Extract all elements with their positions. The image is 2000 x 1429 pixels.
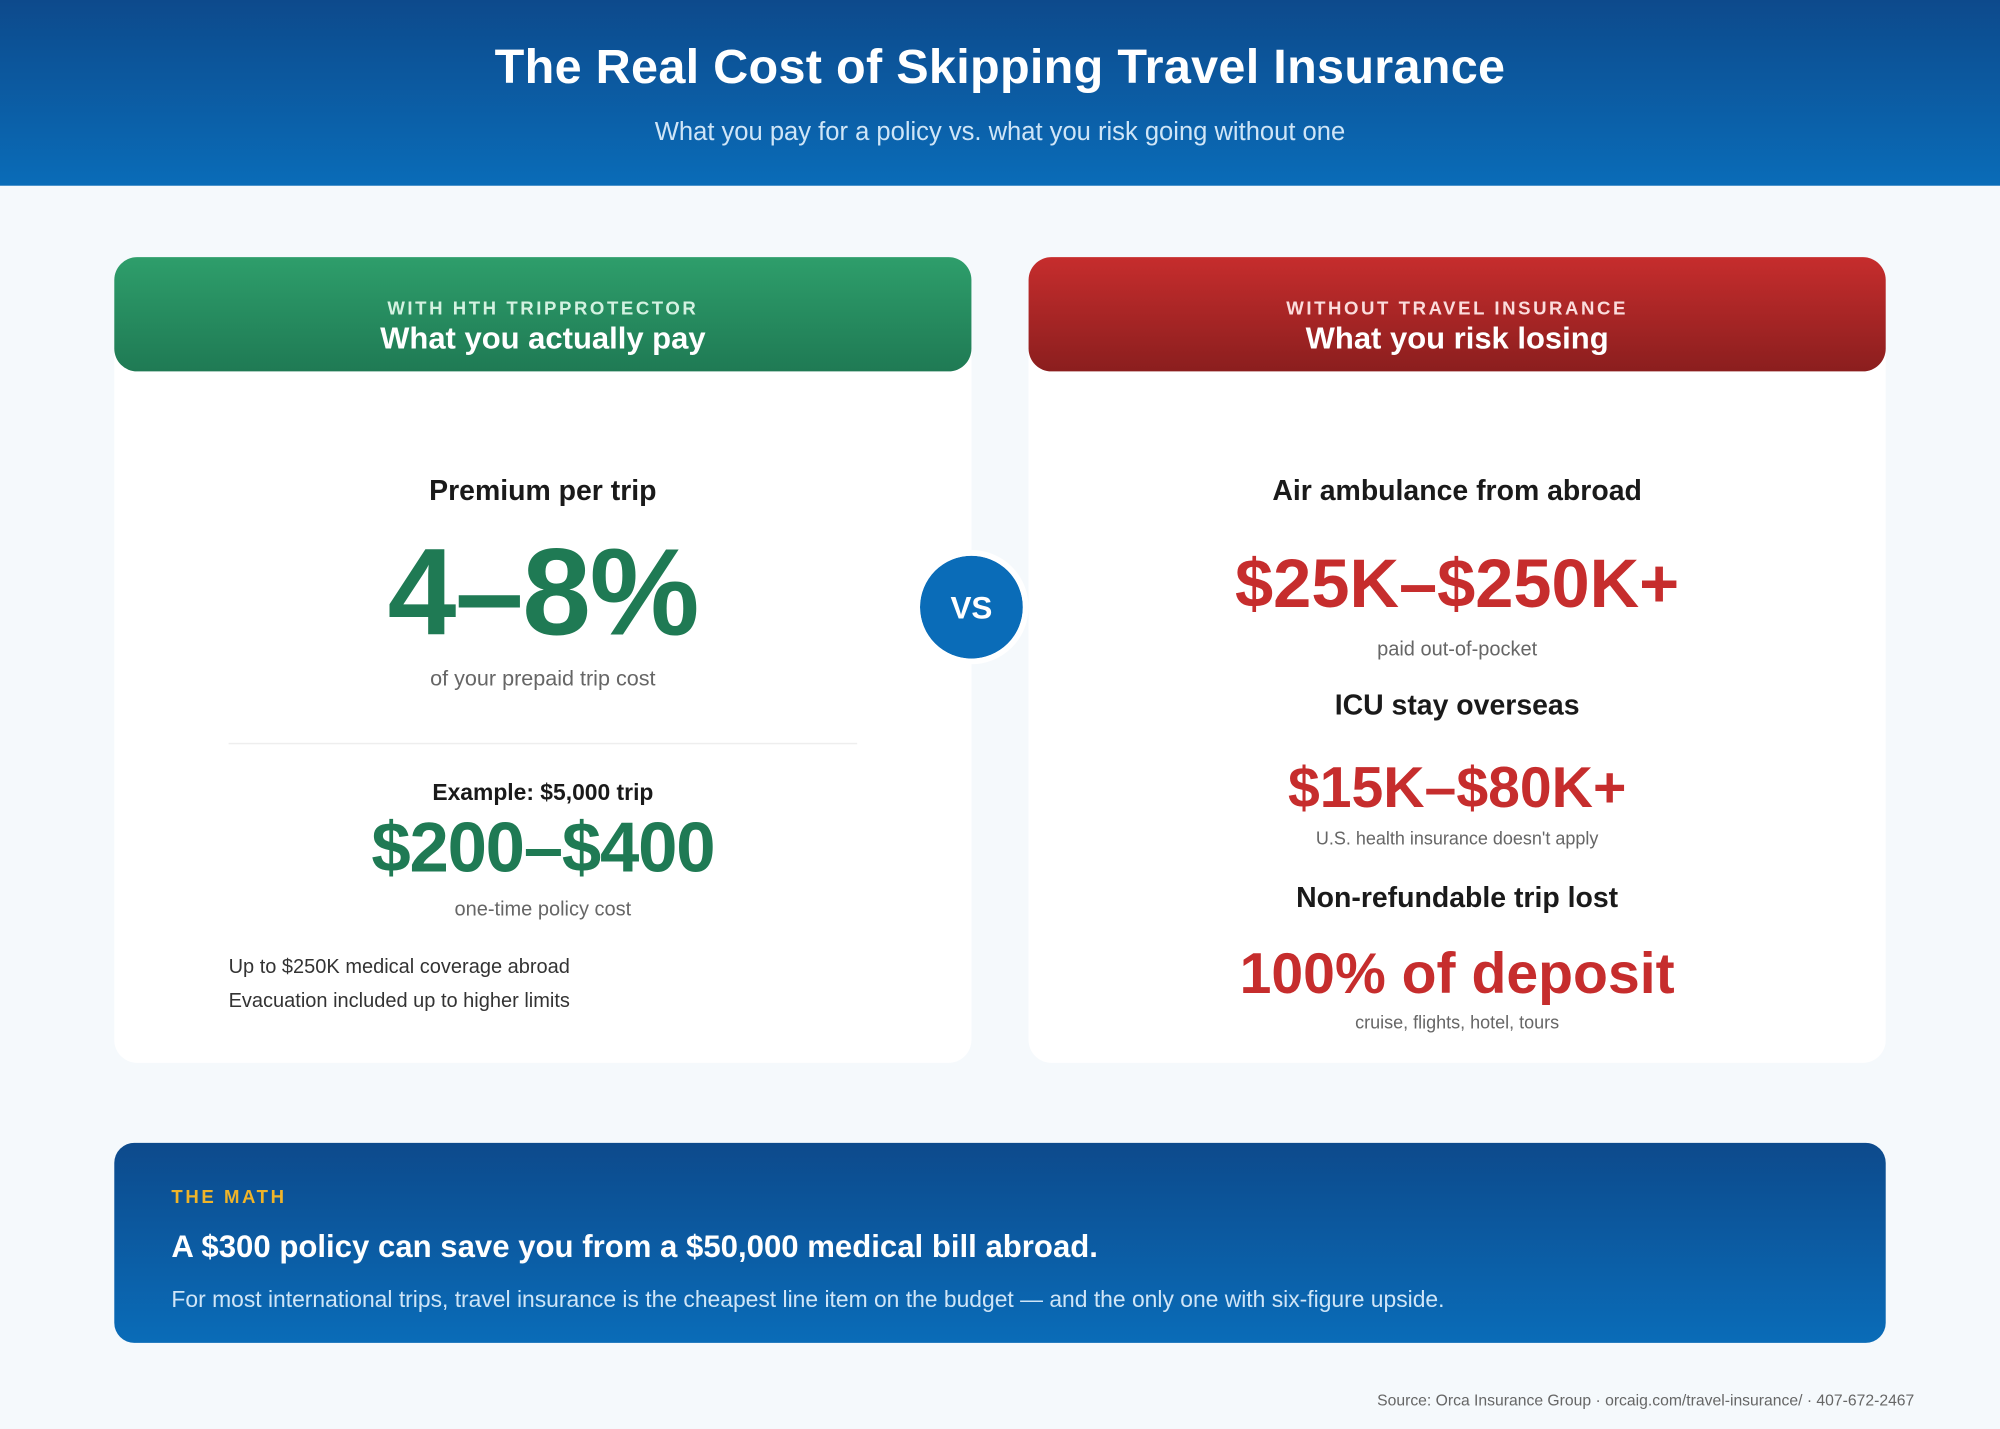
risk: ICU stay: U.S. health insurance doesn't apply bbox=[1316, 828, 1598, 848]
risk: ICU stay bbox=[1288, 690, 1626, 848]
example caption: one-time policy cost bbox=[454, 897, 631, 920]
risk: non-refundable trip: 100% of deposit bbox=[1240, 943, 1675, 1006]
risk: air ambulance: paid out-of-pocket bbox=[1377, 637, 1537, 660]
panel header: with insurance: WITH HTH TRIPPROTECTOR bbox=[387, 297, 698, 319]
source line: Source: Orca Insurance Group · orcaig.com/travel-insurance/ · 407-672-2467 bbox=[1377, 1393, 1914, 1410]
example label: Example: $5,000 trip bbox=[432, 781, 653, 805]
panel header: with insurance bbox=[114, 257, 971, 371]
risk: air ambulance: $25K–$250K+ bbox=[1235, 548, 1679, 623]
risk: non-refundable trip: Non-refundable trip lost bbox=[1296, 882, 1618, 914]
coverage notes bbox=[229, 954, 570, 1011]
risk: ICU stay: $15K–$80K+ bbox=[1288, 757, 1626, 820]
risk: air ambulance bbox=[1235, 476, 1679, 660]
premium value: 4–8% bbox=[388, 524, 698, 661]
coverage notes: Up to $250K medical coverage abroad bbox=[229, 954, 570, 976]
vs badge: VS bbox=[950, 590, 992, 626]
coverage notes: Evacuation included up to higher limits bbox=[229, 988, 570, 1011]
premium caption: of your prepaid trip cost bbox=[430, 667, 656, 691]
example value: $200–$400 bbox=[371, 808, 714, 887]
panel: with insurance bbox=[114, 257, 971, 1063]
subtitle: What you pay for a policy vs. what you risk going without one bbox=[655, 117, 1345, 146]
panel header: without insurance: WITHOUT TRAVEL INSURANCE bbox=[1286, 297, 1628, 319]
vs badge bbox=[914, 550, 1029, 664]
math banner bbox=[114, 1143, 1886, 1343]
risk: non-refundable trip: cruise, flights, hotel, tours bbox=[1355, 1013, 1559, 1033]
title: The Real Cost of Skipping Travel Insurance bbox=[495, 40, 1505, 94]
math headline: A $300 policy can save you from a $50,000 medical bill abroad. bbox=[171, 1229, 1098, 1264]
panel: without insurance bbox=[1029, 257, 1886, 1063]
risk: air ambulance: Air ambulance from abroad bbox=[1272, 476, 1642, 507]
math body: For most international trips, travel insurance is the cheapest line item on the budget — and the only one with six-figure upside. bbox=[171, 1288, 1445, 1313]
risk: ICU stay: ICU stay overseas bbox=[1335, 690, 1580, 721]
premium label: Premium per trip bbox=[429, 476, 657, 507]
panel header: without insurance: What you risk losing bbox=[1306, 320, 1609, 356]
math eyebrow: THE MATH bbox=[171, 1185, 287, 1206]
risk: non-refundable trip bbox=[1240, 882, 1675, 1033]
panel header: without insurance bbox=[1029, 257, 1886, 371]
panel header: with insurance: What you actually pay bbox=[380, 320, 706, 356]
header banner bbox=[0, 0, 2000, 186]
